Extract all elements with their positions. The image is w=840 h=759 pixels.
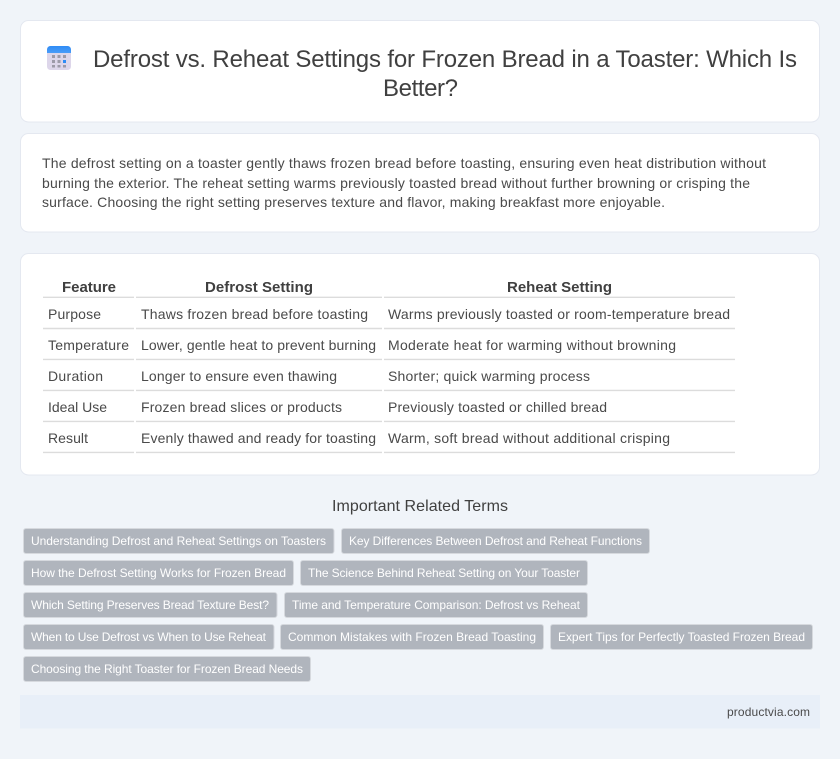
table row: result: Evenly thawed and ready for toasting	[141, 430, 376, 446]
heading: important related terms: Important Related Terms	[332, 498, 508, 515]
text block: introduction	[42, 155, 766, 210]
table row: purpose: Warms previously toasted or room-temperature bread	[388, 306, 730, 322]
table row lines	[43, 297, 735, 452]
table row: temperature: Moderate heat for warming without browning	[388, 337, 676, 353]
tag	[300, 560, 588, 586]
table row: duration: Duration	[48, 368, 103, 384]
icon: calendar	[47, 46, 71, 70]
tag	[24, 656, 310, 682]
table row: purpose: Purpose	[48, 306, 101, 322]
tag: Time and Temperature Comparison: Defrost vs Reheat	[292, 598, 581, 612]
text block: introduction: surface. Choosing the right setting preserves texture and flavor, making breakfast more enjoyable.	[42, 194, 665, 210]
footer	[20, 695, 820, 728]
table header: Feature	[62, 279, 116, 296]
table header: Defrost Setting	[205, 279, 313, 296]
table row: result: Warm, soft bread without additional crisping	[388, 430, 670, 446]
table row: temperature: Temperature	[48, 337, 129, 353]
panel: title card	[20, 20, 820, 122]
table row: temperature	[48, 337, 676, 353]
table row: ideal use: Ideal Use	[48, 399, 107, 415]
tag: Expert Tips for Perfectly Toasted Frozen Bread	[558, 630, 805, 644]
tag	[284, 592, 588, 618]
panel: introduction text	[20, 134, 820, 232]
tag list: related terms	[24, 528, 812, 682]
tag: Understanding Defrost and Reheat Settings on Toasters	[31, 534, 326, 548]
panel: comparison table	[20, 254, 820, 475]
tag: When to Use Defrost vs When to Use Reheat	[31, 630, 267, 644]
tag	[24, 560, 294, 586]
table row: ideal use: Frozen bread slices or products	[141, 399, 342, 415]
table row: duration: Longer to ensure even thawing	[141, 368, 337, 384]
tag: Which Setting Preserves Bread Texture Best?	[31, 598, 269, 612]
tag: Common Mistakes with Frozen Bread Toasting	[288, 630, 536, 644]
tag	[24, 592, 277, 618]
tag	[550, 624, 812, 650]
table row: purpose	[48, 306, 730, 322]
table row: result	[48, 430, 670, 446]
footer source text: productvia.com	[727, 705, 810, 719]
text block: introduction: The defrost setting on a toaster gently thaws frozen bread before toasting, ensuring even heat distribution without	[42, 155, 766, 171]
table header	[62, 279, 612, 296]
text block: introduction: burning the exterior. The reheat setting warms previously toasted bread without further browning or crisping the	[42, 175, 750, 191]
tag: How the Defrost Setting Works for Frozen Bread	[31, 566, 286, 580]
table row: duration: Shorter; quick warming process	[388, 368, 590, 384]
table row: ideal use: Previously toasted or chilled bread	[388, 399, 607, 415]
tag	[24, 624, 274, 650]
tag	[280, 624, 544, 650]
table row: duration	[48, 368, 590, 384]
tag: Choosing the Right Toaster for Frozen Bread Needs	[31, 662, 303, 676]
tag: The Science Behind Reheat Setting on Your Toaster	[308, 566, 580, 580]
table row: result: Result	[48, 430, 88, 446]
title	[93, 46, 797, 102]
table row: temperature: Lower, gentle heat to prevent burning	[141, 337, 376, 353]
title: Defrost vs. Reheat Settings for Frozen Bread in a Toaster: Which Is	[93, 46, 797, 73]
tag	[342, 528, 650, 554]
title: Better?	[383, 75, 458, 102]
table row: purpose: Thaws frozen bread before toasting	[141, 306, 368, 322]
tag: Key Differences Between Defrost and Reheat Functions	[349, 534, 642, 548]
table header: Reheat Setting	[507, 279, 612, 296]
table row: ideal use	[48, 399, 607, 415]
tag	[24, 528, 334, 554]
